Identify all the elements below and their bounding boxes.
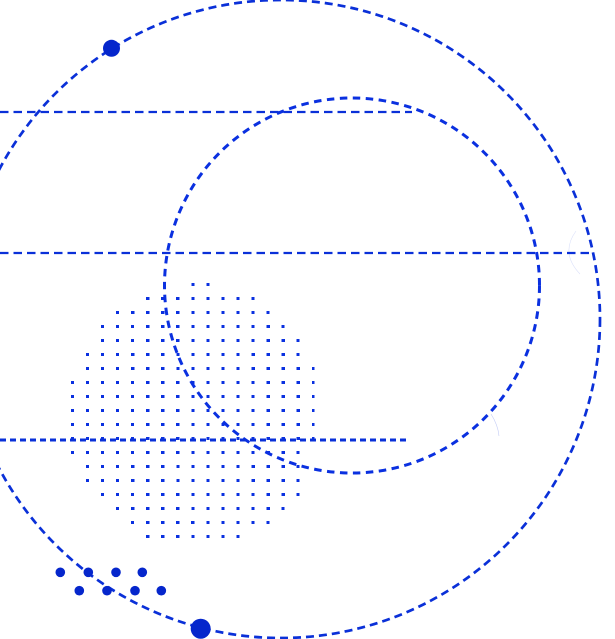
dashed line: top (0, 111, 412, 113)
dashed line: middle (0, 252, 593, 254)
faint arc: right (569, 231, 580, 274)
dot grid (71, 285, 315, 537)
large dot: bottom (191, 619, 211, 639)
small dot cluster (56, 568, 166, 596)
large dot: top (103, 40, 120, 57)
faint arc: lower right (491, 414, 499, 436)
inner dashed circle (164, 98, 540, 473)
dashed line: bottom (0, 438, 406, 442)
